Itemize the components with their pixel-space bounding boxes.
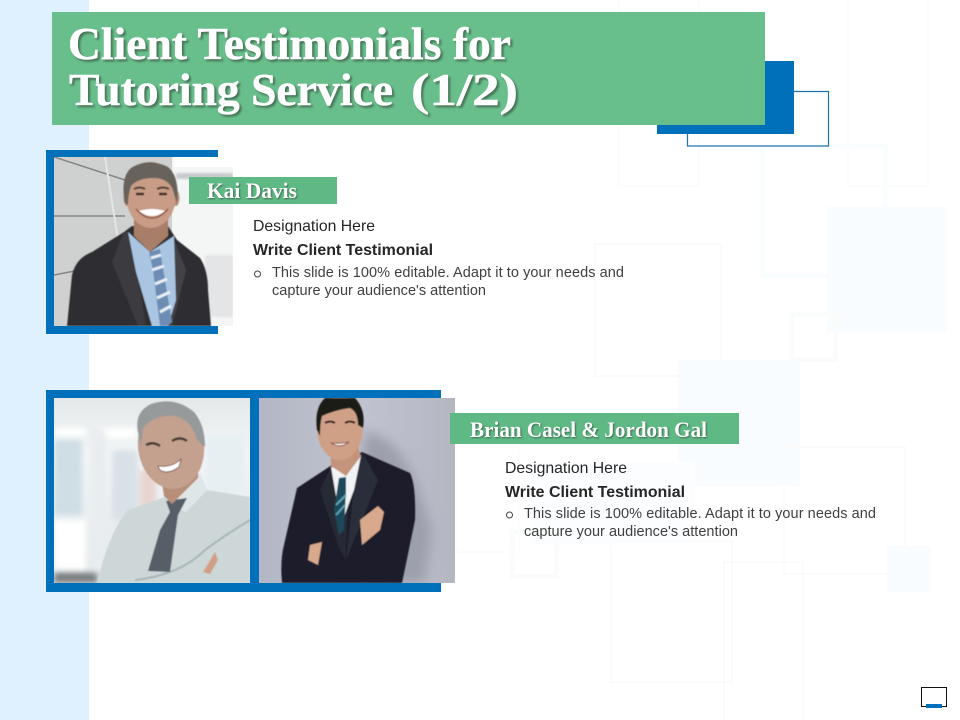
testimonial heading: Write Client Testimonial bbox=[253, 242, 433, 259]
photo frame bbox=[46, 390, 441, 592]
neck bbox=[162, 473, 198, 504]
title banner bbox=[52, 12, 765, 125]
testimonial heading: Write Client Testimonial bbox=[505, 484, 685, 501]
photo: Kai Davis bbox=[54, 157, 233, 326]
suit bbox=[67, 226, 211, 326]
shirt bbox=[128, 232, 176, 326]
background decorative squares bbox=[456, 0, 947, 720]
photo frame bbox=[46, 150, 218, 334]
hair bbox=[137, 401, 205, 447]
head bbox=[137, 415, 205, 489]
tie bbox=[149, 249, 172, 326]
name bar bbox=[189, 177, 337, 204]
decorative blue block behind title bbox=[657, 61, 794, 134]
hand bbox=[203, 552, 218, 574]
testimonial text: capture your audience's attention bbox=[524, 524, 738, 540]
hair bbox=[316, 398, 364, 436]
title banner: (1/2) bbox=[411, 64, 518, 115]
name: Kai Davis bbox=[207, 178, 297, 203]
eyes bbox=[146, 438, 187, 446]
photo: Jordon Gal bbox=[259, 396, 455, 583]
hands bbox=[360, 506, 384, 545]
head bbox=[126, 162, 176, 228]
panel: Brian Casel and Jordon Gal testimonial bbox=[46, 390, 876, 592]
testimonial text: This slide is 100% editable. Adapt it to your needs and bbox=[524, 506, 876, 522]
shirt bbox=[97, 490, 250, 583]
testimonial text: This slide is 100% editable. Adapt it to your needs and bbox=[272, 265, 624, 281]
name bar bbox=[450, 413, 739, 444]
bullet bbox=[506, 512, 512, 518]
decorative outline behind title bbox=[688, 92, 828, 146]
tie bbox=[334, 477, 346, 535]
brows and eyes bbox=[134, 188, 169, 189]
eyes bbox=[325, 422, 355, 423]
bullet bbox=[254, 271, 260, 277]
neck bbox=[133, 219, 169, 252]
title banner: Client Testimonials for bbox=[68, 18, 511, 69]
smile bbox=[158, 459, 181, 472]
hair bbox=[123, 162, 178, 205]
neck bbox=[331, 448, 361, 476]
designation: Designation Here bbox=[253, 218, 375, 235]
title banner: Tutoring Service bbox=[69, 64, 393, 115]
designation: Designation Here bbox=[505, 460, 627, 477]
names: Brian Casel & Jordon Gal bbox=[470, 417, 707, 442]
head bbox=[317, 396, 363, 460]
tie bbox=[148, 498, 187, 572]
panel: Kai Davis testimonial bbox=[46, 150, 624, 334]
smile bbox=[331, 442, 349, 446]
ears bbox=[123, 195, 128, 206]
shirt bbox=[330, 456, 362, 516]
testimonial text: capture your audience's attention bbox=[272, 283, 486, 299]
left tinted strip bbox=[0, 0, 89, 720]
icon: slide corner bbox=[922, 688, 946, 708]
smile bbox=[139, 209, 165, 216]
photo: Brian Casel bbox=[54, 398, 250, 583]
suit bbox=[281, 452, 415, 583]
